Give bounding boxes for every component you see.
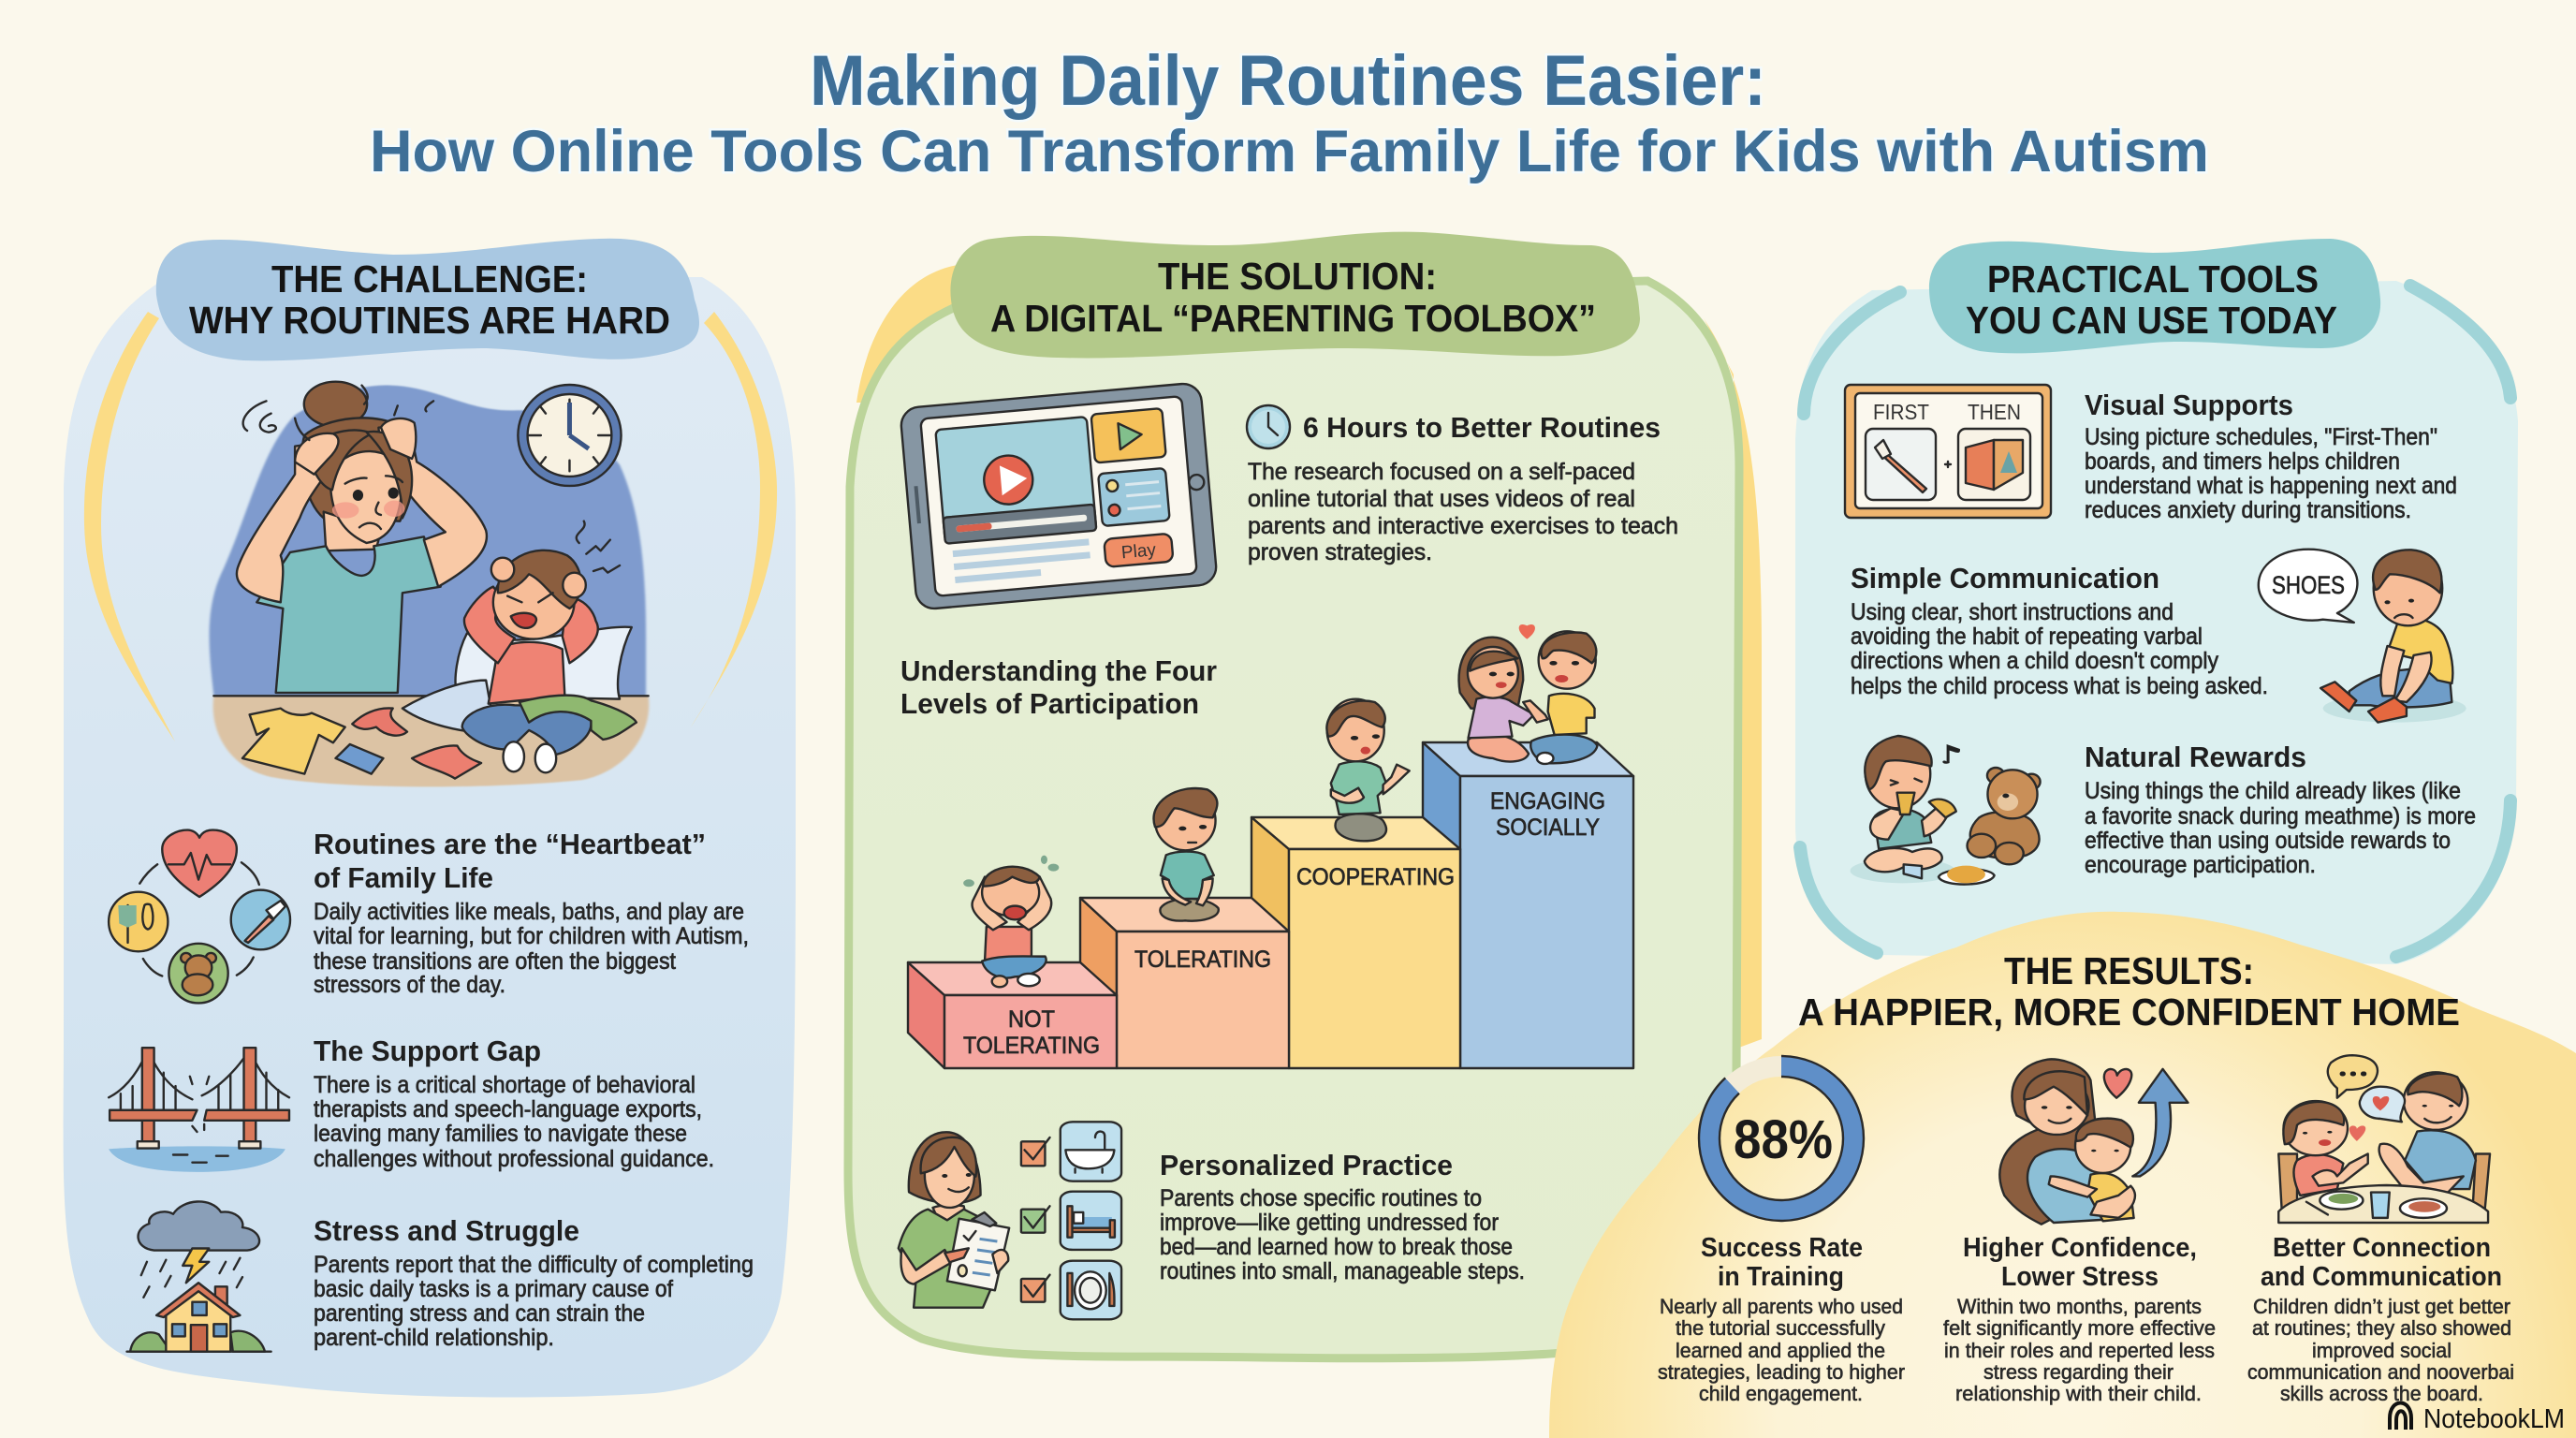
heading: THE SOLUTION: bbox=[1158, 255, 1437, 298]
step: engaging socially bbox=[1423, 742, 1633, 1068]
text: better connection: Children didn’t just get better bbox=[2253, 1295, 2510, 1318]
step: tolerating: TOLERATING bbox=[1134, 946, 1271, 973]
illustration: tablet bbox=[900, 382, 1218, 610]
heading blob bbox=[1929, 239, 2380, 353]
sitting child bbox=[1154, 788, 1219, 921]
text: simple communication bbox=[1851, 562, 2268, 699]
text: better connection: skills across the board. bbox=[2280, 1382, 2483, 1405]
text: success rate: Nearly all parents who used bbox=[1660, 1295, 1903, 1318]
step: tolerating bbox=[1080, 898, 1289, 1068]
panel: the solution bbox=[848, 232, 1762, 1358]
crying child bbox=[963, 856, 1059, 987]
text: routines heartbeat: of Family Life bbox=[314, 861, 493, 894]
panel: practical tools bbox=[1795, 239, 2518, 964]
icon: first-then board: FIRST bbox=[1873, 400, 1929, 424]
panel: the results bbox=[1549, 912, 2576, 1438]
text: personalized practice: routines into small, manageable steps. bbox=[1160, 1258, 1525, 1284]
scattered clothes bbox=[242, 708, 481, 779]
chart: participation staircase bbox=[908, 624, 1633, 1068]
icon: clock bbox=[1247, 405, 1290, 448]
text: success rate bbox=[1658, 1233, 1905, 1405]
item: support gap bbox=[109, 1034, 714, 1172]
routine checklist bbox=[1021, 1122, 1121, 1319]
text: six hours: 6 Hours to Better Routines bbox=[1303, 411, 1661, 444]
heading bbox=[990, 255, 1596, 340]
text: higher confidence: felt significantly more effective bbox=[1943, 1316, 2216, 1340]
item: stress and struggle bbox=[127, 1201, 754, 1352]
teal panel background bbox=[1795, 281, 2518, 964]
text: six hours: The research focused on a self-paced bbox=[1248, 459, 1635, 485]
text: support gap: There is a critical shortage of behavioral bbox=[314, 1072, 695, 1098]
text: success rate: Success Rate bbox=[1701, 1233, 1863, 1263]
text: better connection: and Communication bbox=[2261, 1262, 2502, 1292]
text: visual supports bbox=[2085, 389, 2457, 523]
heading: A HAPPIER, MORE CONFIDENT HOME bbox=[1798, 990, 2460, 1034]
blue panel background bbox=[64, 277, 796, 1398]
text: visual supports: boards, and timers helps children bbox=[2085, 448, 2400, 475]
child bbox=[402, 521, 637, 772]
heading bbox=[1966, 257, 2337, 342]
text: personalized practice: improve—like getting undressed for bbox=[1160, 1210, 1499, 1236]
text: higher confidence: Lower Stress bbox=[2001, 1262, 2159, 1292]
text: routines heartbeat: vital for learning, but for children with Autism, bbox=[314, 923, 749, 949]
text: natural rewards: Natural Rewards bbox=[2085, 741, 2306, 773]
icon: first-then board: THEN bbox=[1968, 400, 2021, 424]
text: routines heartbeat: Routines are the “Heartbeat” bbox=[314, 828, 706, 860]
text: routines heartbeat: stressors of the day. bbox=[314, 972, 505, 998]
couple of children bbox=[1459, 624, 1597, 764]
text: higher confidence: stress regarding their bbox=[1983, 1360, 2174, 1384]
teal corner strokes bbox=[1800, 286, 2510, 957]
chart: 88% donut bbox=[1699, 1056, 1864, 1221]
text: routines heartbeat: these transitions are often the biggest bbox=[314, 948, 676, 975]
logo: NotebookLM: NotebookLM bbox=[2423, 1404, 2565, 1434]
step: engaging socially: SOCIALLY bbox=[1496, 814, 1600, 841]
heading: four levels bbox=[900, 654, 1217, 720]
icon: broken bridge bbox=[109, 1048, 289, 1172]
step: not tolerating: TOLERATING bbox=[963, 1033, 1100, 1059]
text: support gap: leaving many families to navigate these bbox=[314, 1121, 687, 1147]
item: routines heartbeat bbox=[109, 828, 749, 1003]
text: better connection: improved social bbox=[2312, 1339, 2452, 1362]
icon: storm over house bbox=[127, 1201, 271, 1352]
title bbox=[370, 41, 2209, 184]
icon: routine cycle bbox=[109, 830, 290, 1003]
step: cooperating: COOPERATING bbox=[1296, 864, 1455, 890]
heading: four levels: Understanding the Four bbox=[900, 654, 1217, 687]
text: success rate: the tutorial successfully bbox=[1676, 1316, 1886, 1340]
chart: 88% donut: 88% bbox=[1734, 1109, 1833, 1170]
heading: four levels: Levels of Participation bbox=[900, 687, 1199, 720]
text: better connection: at routines; they also showed bbox=[2252, 1316, 2511, 1340]
step: engaging socially: ENGAGING bbox=[1490, 788, 1605, 814]
illustration: parent hugging child with arrow bbox=[1999, 1059, 2188, 1225]
text: better connection: communication and nooverbai bbox=[2247, 1360, 2514, 1384]
teddy bear bbox=[1968, 768, 2041, 864]
step: not tolerating: NOT bbox=[1008, 1006, 1055, 1033]
illustration: parent with checklist bbox=[899, 1122, 1121, 1319]
heading: THE CHALLENGE: bbox=[271, 257, 588, 301]
text: six hours: online tutorial that uses videos of real bbox=[1248, 486, 1635, 512]
text: simple communication: Simple Communication bbox=[1851, 562, 2159, 594]
text: personalized practice: Parents chose specific routines to bbox=[1160, 1185, 1482, 1211]
step: cooperating bbox=[1251, 817, 1460, 1068]
heading: A DIGITAL “PARENTING TOOLBOX” bbox=[990, 297, 1596, 340]
text: stress and struggle: basic daily tasks is a primary cause of bbox=[314, 1276, 673, 1302]
text: higher confidence bbox=[1943, 1233, 2216, 1405]
text: natural rewards bbox=[2085, 741, 2476, 878]
stress marks bbox=[243, 386, 433, 440]
text: six hours bbox=[1248, 411, 1678, 565]
text: visual supports: Using picture schedules, "First-Then" bbox=[2085, 424, 2437, 450]
text: support gap: challenges without professional guidance. bbox=[314, 1146, 714, 1172]
results background bbox=[1549, 912, 2576, 1438]
text: stress and struggle: Parents report that the difficulty of completing bbox=[314, 1252, 754, 1278]
text: visual supports: reduces anxiety during transitions. bbox=[2085, 497, 2411, 523]
text: six hours: proven strategies. bbox=[1248, 539, 1432, 565]
text: natural rewards: effective than using outside rewards to bbox=[2085, 828, 2451, 854]
illustration: child with snack and teddy bbox=[1851, 736, 2041, 885]
text: simple communication: helps the child process what is being asked. bbox=[1851, 673, 2268, 699]
title: How Online Tools Can Transform Family Life for Kids with Autism bbox=[370, 119, 2209, 184]
heading: WHY ROUTINES ARE HARD bbox=[189, 299, 670, 342]
text: simple communication: Using clear, short instructions and bbox=[1851, 599, 2174, 625]
text: higher confidence: relationship with their child. bbox=[1955, 1382, 2202, 1405]
text: better connection bbox=[2247, 1233, 2514, 1405]
text: natural rewards: a favorite snack during meathme) is more bbox=[2085, 803, 2476, 829]
text: support gap bbox=[314, 1034, 714, 1172]
icon: first-then board bbox=[1845, 385, 2051, 518]
illustration: family talking at table bbox=[2278, 1055, 2490, 1223]
mother bbox=[237, 382, 487, 693]
title: Making Daily Routines Easier: bbox=[810, 41, 1766, 121]
illustration: speech bubble and child tying shoes: SHOES bbox=[2272, 571, 2345, 599]
text: simple communication: directions when a child doesn't comply bbox=[1851, 648, 2218, 674]
illustration: speech bubble and child tying shoes bbox=[2259, 550, 2466, 723]
text: success rate: strategies, leading to higher bbox=[1658, 1360, 1905, 1384]
text: personalized practice: Personalized Practice bbox=[1160, 1149, 1453, 1181]
text: stress and struggle: Stress and Struggle bbox=[314, 1214, 579, 1247]
text: success rate: in Training bbox=[1718, 1262, 1844, 1292]
kids on stairs bbox=[963, 624, 1597, 987]
text: personalized practice bbox=[1160, 1149, 1525, 1284]
heading blob bbox=[950, 232, 1640, 358]
heading: PRACTICAL TOOLS bbox=[1987, 257, 2319, 301]
text: stress and struggle: parent-child relationship. bbox=[314, 1325, 554, 1351]
text: routines heartbeat: Daily activities like meals, baths, and play are bbox=[314, 899, 744, 925]
text: six hours: parents and interactive exercises to teach bbox=[1248, 513, 1678, 539]
text: simple communication: avoiding the habit of repeating varbal bbox=[1851, 624, 2203, 650]
clock bbox=[518, 385, 622, 486]
text: success rate: learned and applied the bbox=[1676, 1339, 1885, 1362]
heading: THE RESULTS: bbox=[2004, 949, 2254, 992]
text: success rate: child engagement. bbox=[1699, 1382, 1863, 1405]
text: higher confidence: Within two months, parents bbox=[1957, 1295, 2202, 1318]
text: stress and struggle: parenting stress and can strain the bbox=[314, 1300, 645, 1327]
yellow backing shapes bbox=[856, 264, 1762, 1049]
text: personalized practice: bed—and learned how to break those bbox=[1160, 1234, 1513, 1260]
text: support gap: therapists and speech-language exports, bbox=[314, 1096, 702, 1123]
heading bbox=[1798, 949, 2460, 1034]
panel: the challenge bbox=[64, 239, 796, 1398]
text: visual supports: Visual Supports bbox=[2085, 389, 2293, 421]
text: routines heartbeat bbox=[314, 828, 749, 998]
text: higher confidence: in their roles and reperted less bbox=[1944, 1339, 2215, 1362]
text: support gap: The Support Gap bbox=[314, 1034, 541, 1067]
heading: YOU CAN USE TODAY bbox=[1966, 299, 2337, 342]
text: better connection: Better Connection bbox=[2273, 1233, 2491, 1263]
text: natural rewards: Using things the child already likes (like bbox=[2085, 778, 2461, 804]
text: stress and struggle bbox=[314, 1214, 754, 1351]
illustration: stressed mother and crying child bbox=[210, 382, 649, 786]
text: natural rewards: encourage participation. bbox=[2085, 852, 2316, 878]
heading bbox=[189, 257, 670, 342]
green panel background bbox=[848, 281, 1739, 1358]
text: visual supports: understand what is happening next and bbox=[2085, 473, 2457, 499]
cooperating child bbox=[1326, 699, 1410, 841]
illustration: tablet: Play bbox=[1120, 540, 1157, 563]
heading blob bbox=[156, 239, 699, 360]
text: higher confidence: Higher Confidence, bbox=[1963, 1233, 2197, 1263]
step: not tolerating bbox=[908, 962, 1117, 1068]
yellow accent strokes bbox=[84, 312, 777, 741]
